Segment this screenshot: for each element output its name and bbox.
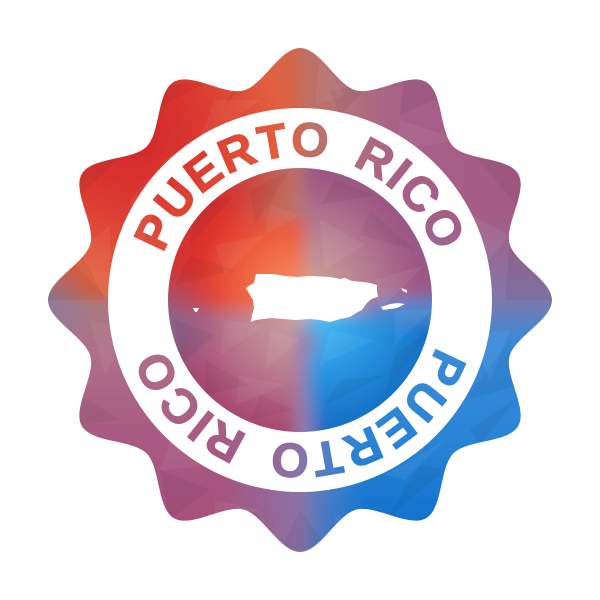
bottom curved label: PUERTO RICO (138, 348, 466, 478)
scalloped twelve-point badge shape (48, 48, 552, 552)
Mona island (193, 308, 199, 312)
Culebra island (401, 288, 407, 293)
white ring (108, 108, 492, 492)
Vieques island (381, 303, 405, 310)
top curved label: PUERTO RICO (134, 122, 462, 252)
main island (246, 274, 378, 322)
inner low-poly circle (168, 168, 432, 432)
map: Puerto Rico main island and smaller islands (193, 274, 407, 322)
badge: low-poly travel stamp (48, 48, 552, 552)
